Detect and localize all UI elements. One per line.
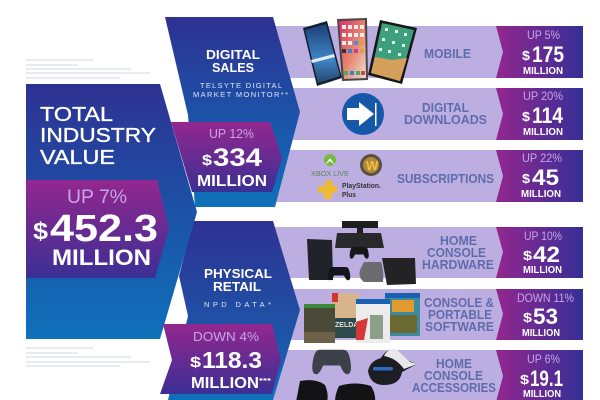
icon: subscription logos: XBOX LIVE — [311, 169, 349, 178]
panel: digital sales — [165, 17, 300, 207]
price: digital downloads: 114 — [532, 103, 564, 128]
strip: home console hardware — [270, 227, 583, 278]
panel: physical retail — [168, 221, 300, 400]
strip: home console hardware: CONSOLE — [427, 245, 486, 260]
price: software — [496, 289, 583, 340]
callout: total value: UP 7% — [67, 187, 127, 208]
icon: download arrow — [342, 93, 384, 135]
price: software: MILLION — [522, 328, 560, 339]
panel: digital sales: TELSYTE DIGITAL — [200, 81, 282, 90]
callout: digital value: MILLION — [197, 173, 267, 190]
price: accessories: MILLION — [523, 389, 561, 400]
price: digital downloads: MILLION — [523, 127, 563, 138]
price: digital downloads: UP 20% — [523, 91, 563, 103]
callout: total value: $ — [33, 218, 49, 245]
callout: physical value — [160, 324, 281, 394]
callout: physical value: DOWN 4% — [193, 330, 259, 344]
panel: total industry value: INDUSTRY — [40, 125, 156, 147]
price: software: DOWN 11% — [517, 293, 574, 305]
callout: digital value: 334 — [213, 144, 262, 172]
strip: digital downloads: DIGITAL — [422, 100, 469, 115]
strip: mobile — [270, 26, 583, 78]
strip: home console accessories: HOME — [436, 356, 472, 371]
panel: digital sales: SALES — [212, 60, 254, 75]
faint text lines bottom — [26, 347, 150, 367]
price: mobile — [496, 26, 583, 78]
strip: home console accessories: ACCESSORIES — [412, 380, 496, 395]
strip: home console accessories — [270, 350, 583, 400]
price: software: $ — [523, 310, 533, 325]
callout: total value: MILLION — [52, 245, 151, 270]
price: accessories — [496, 350, 583, 400]
strip: digital downloads: DOWNLOADS — [404, 112, 487, 127]
callout: total value: 452.3 — [50, 208, 158, 250]
icon: game boxes: ZELDA — [335, 322, 358, 329]
callout: physical value: MILLION — [191, 375, 259, 392]
price: accessories: 19.1 — [530, 366, 563, 391]
price: subscriptions — [496, 150, 583, 202]
price: accessories: UP 6% — [527, 354, 560, 366]
price: accessories: $ — [520, 372, 530, 387]
strip: console and portable software: SOFTWARE — [425, 319, 494, 334]
panel: physical retail: NPD DATA* — [204, 300, 271, 309]
price: mobile: UP 5% — [527, 30, 560, 42]
callout: digital value: UP 12% — [209, 127, 254, 141]
price: subscriptions: UP 22% — [522, 153, 562, 165]
price: mobile: 175 — [532, 42, 564, 67]
panel: physical retail: PHYSICAL — [204, 266, 272, 281]
callout: digital value — [171, 122, 282, 192]
strip: digital downloads — [270, 88, 583, 140]
price: hardware: MILLION — [523, 265, 562, 276]
price: hardware: UP 10% — [524, 231, 562, 243]
panel: digital sales: MARKET MONITOR** — [193, 90, 288, 99]
panel: digital sales: DIGITAL — [206, 47, 260, 62]
strip: console and portable software: CONSOLE & — [424, 295, 494, 310]
price: subscriptions: MILLION — [521, 189, 561, 200]
callout: physical value: 118.3 — [202, 347, 262, 373]
strip: console and portable software — [270, 289, 583, 340]
callout: digital value: $ — [202, 152, 213, 169]
price: hardware — [496, 227, 583, 278]
icon: phones — [303, 18, 417, 86]
icon: controllers and headset — [296, 349, 417, 400]
callout: total value — [26, 180, 169, 278]
icon: subscription logos: W — [366, 158, 379, 173]
panel: total industry value: VALUE — [40, 147, 115, 169]
strip: subscriptions: SUBSCRIPTIONS — [397, 171, 494, 186]
faint text lines top — [26, 59, 150, 79]
panel: total industry value — [26, 84, 197, 339]
strip: console and portable software: PORTABLE — [428, 307, 492, 322]
price: software: 53 — [533, 304, 558, 329]
icon: game boxes — [304, 293, 420, 343]
price: subscriptions: $ — [522, 171, 531, 186]
icon: consoles — [307, 221, 416, 285]
strip: home console hardware: HARDWARE — [422, 257, 494, 272]
price: subscriptions: 45 — [532, 165, 559, 190]
strip: mobile: MOBILE — [424, 46, 471, 61]
strip: home console accessories: CONSOLE — [424, 368, 483, 383]
price: hardware: $ — [523, 248, 533, 263]
panel: physical retail: RETAIL — [213, 279, 261, 294]
icon: subscription logos: PlayStation. — [342, 183, 381, 190]
price: mobile: $ — [522, 48, 531, 63]
price: digital downloads: $ — [522, 109, 531, 124]
callout: physical value: $ — [190, 354, 202, 371]
icon: subscription logos — [311, 154, 382, 199]
price: hardware: 42 — [533, 242, 560, 267]
price: digital downloads — [496, 88, 583, 140]
price: mobile: MILLION — [523, 66, 563, 77]
icon: subscription logos: Plus — [342, 192, 356, 199]
strip: home console hardware: HOME — [440, 233, 477, 248]
callout: physical value: *** — [259, 378, 271, 385]
strip: subscriptions — [270, 150, 583, 202]
panel: total industry value: TOTAL — [40, 104, 113, 126]
